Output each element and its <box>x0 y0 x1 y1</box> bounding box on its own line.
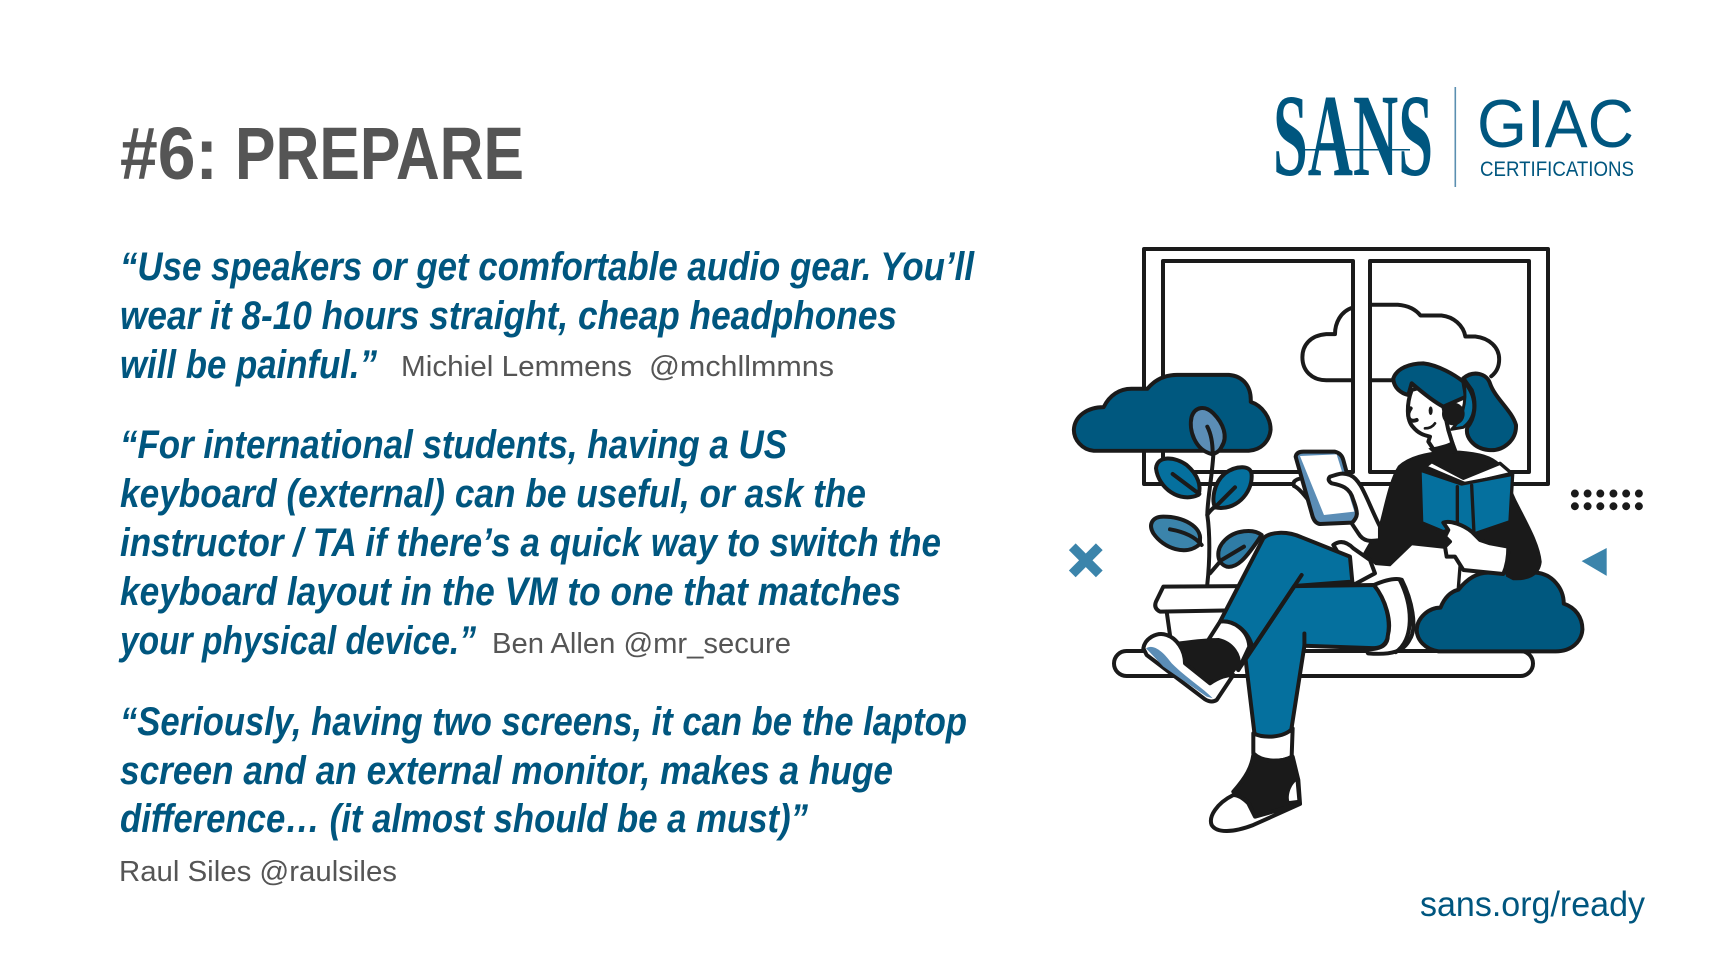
quote block: Raul Siles: “Seriously, having two screens, it can be the laptop <box>120 700 967 744</box>
headphone <box>1442 403 1465 425</box>
plant <box>1151 408 1262 635</box>
headphone band <box>1452 383 1474 429</box>
quote block: Ben Allen <box>118 423 941 663</box>
quote block: Raul Siles: difference… (it almost should be a must)” <box>120 797 808 841</box>
quote block: Michiel Lemmens: “Use speakers or get comfortable audio gear. You’ll <box>120 245 975 289</box>
quote block: Ben Allen: keyboard layout in the VM to one that matches <box>120 570 901 614</box>
quote block: Raul Siles <box>119 700 967 888</box>
logo: SANS GIAC Certifications: SANS <box>1273 70 1433 201</box>
title: PREPARE <box>235 112 524 195</box>
quote block: Raul Siles: Raul Siles @raulsiles <box>119 856 397 888</box>
hand on book <box>1443 522 1508 574</box>
logo: SANS GIAC Certifications: GIAC <box>1477 86 1634 162</box>
crossing leg and foot <box>1143 533 1352 701</box>
quote block: Ben Allen: Ben Allen @mr_secure <box>492 628 791 660</box>
dark cloud left <box>1074 375 1271 451</box>
decoration: blue cross <box>1072 547 1099 574</box>
logo: SANS GIAC Certifications: CERTIFICATIONS <box>1480 158 1634 181</box>
phone and arm <box>1294 452 1380 541</box>
title <box>120 112 524 195</box>
quote block: Ben Allen: your physical device.” <box>118 619 476 663</box>
plant pot <box>1155 586 1260 612</box>
body edge above cushion <box>1458 567 1460 588</box>
rear leg <box>1246 579 1413 739</box>
quote block: Ben Allen: keyboard (external) can be useful, or ask the <box>120 472 866 516</box>
website link: sans.org/ready <box>1420 885 1645 924</box>
quote block: Ben Allen: “For international students, having a US <box>120 423 787 467</box>
title: #6: <box>120 112 218 195</box>
head and hair <box>1393 363 1516 455</box>
quote block: Michiel Lemmens: @mchllmmns <box>649 351 834 383</box>
quote block: Michiel Lemmens: Michiel Lemmens <box>401 351 632 383</box>
quote block: Raul Siles: screen and an external monitor, makes a huge <box>120 749 893 793</box>
quote block: Ben Allen: instructor / TA if there’s a quick way to switch the <box>120 521 941 565</box>
cloud behind window <box>1302 305 1499 380</box>
decoration: dots <box>1571 490 1643 510</box>
open book <box>1420 462 1513 534</box>
shorts cuff <box>1366 579 1413 654</box>
decoration: blue triangle <box>1582 548 1607 576</box>
torso and sleeves <box>1364 452 1541 579</box>
window frame <box>1144 249 1548 484</box>
illustration: woman reading on window sill <box>1074 249 1582 831</box>
shorts hem upper <box>1333 542 1375 585</box>
window sill <box>1114 651 1533 676</box>
quote block: Michiel Lemmens: wear it 8-10 hours straight, cheap headphones <box>120 294 897 338</box>
quote block: Michiel Lemmens <box>120 245 975 387</box>
rear foot <box>1211 728 1300 831</box>
quote block: Michiel Lemmens: will be painful.” <box>120 343 377 387</box>
cushion cloud right <box>1417 573 1582 651</box>
